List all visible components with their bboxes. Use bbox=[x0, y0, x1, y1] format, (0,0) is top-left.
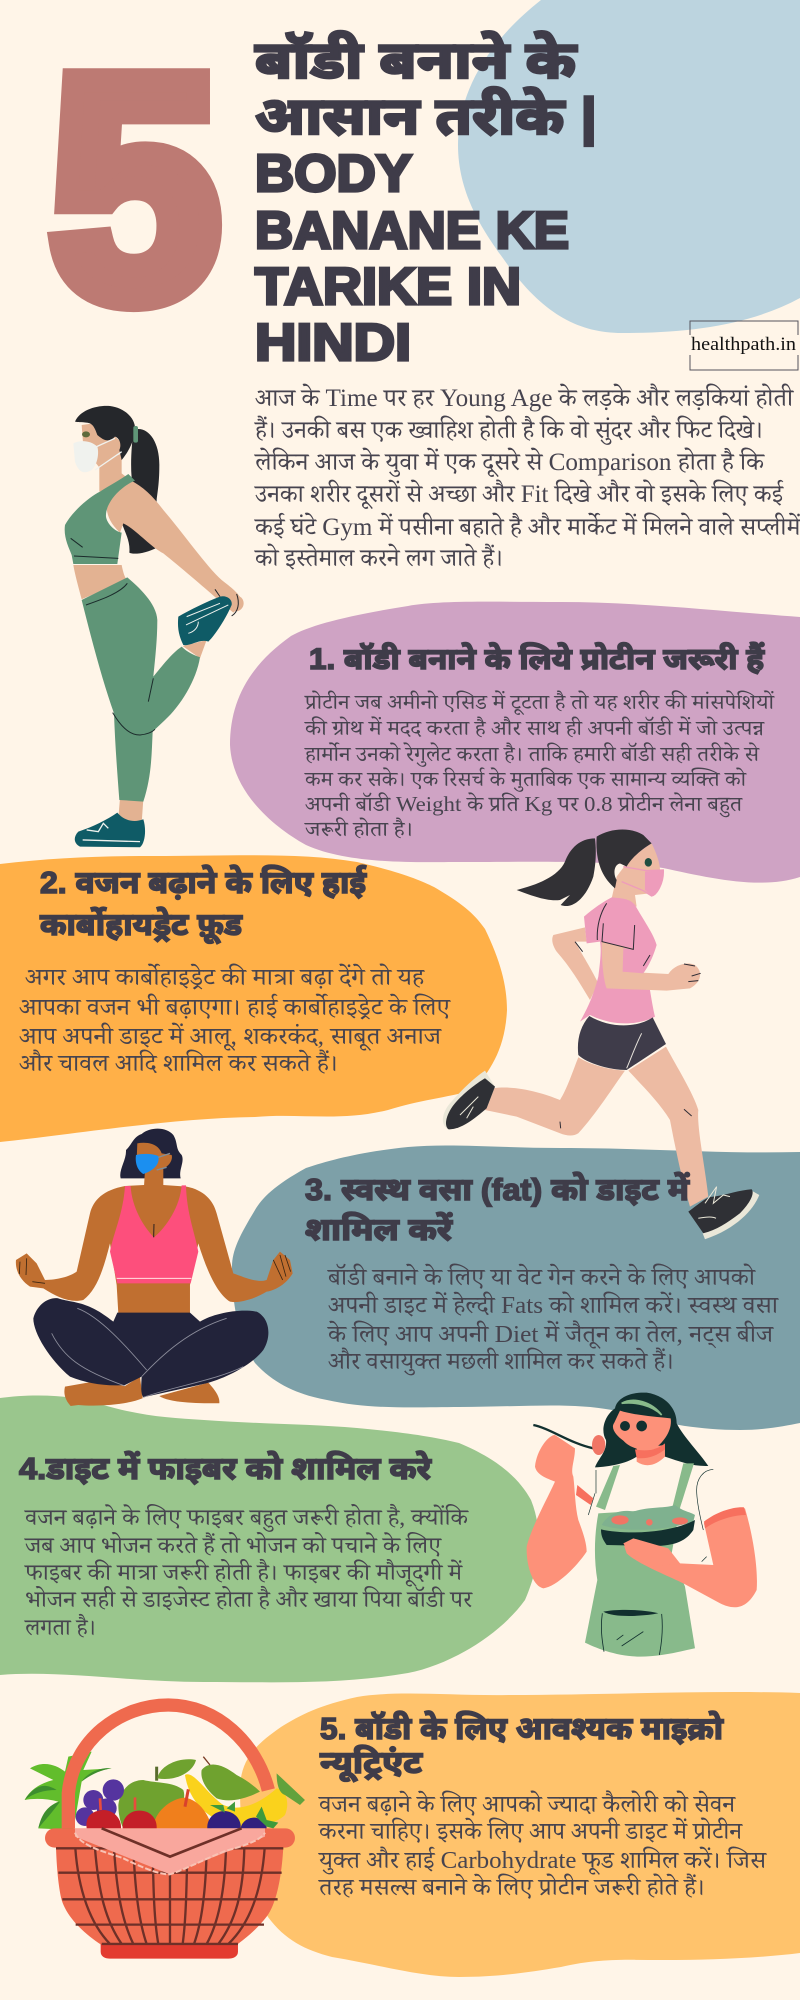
text: section 2 body: और चावल आदि शामिल कर सकते हैं। bbox=[19, 1049, 338, 1077]
text: section 2 body: आप अपनी डाइट में आलू, शकरकंद, साबूत अनाज bbox=[19, 1022, 443, 1051]
illustration: stretching woman bbox=[65, 406, 244, 847]
intro text: उनका शरीर दूसरों से अच्छा और Fit दिखे और वो इसके लिए कई bbox=[254, 479, 784, 509]
text: section 3 body: के लिए आप अपनी Diet में जैतून का तेल, नट्स बीज bbox=[327, 1320, 775, 1349]
heading: section 5 bbox=[320, 1711, 724, 1782]
text: section 5 body: वजन बढ़ाने के लिए आपको ज्यादा कैलोरी को सेवन bbox=[318, 1790, 737, 1818]
intro text: आज के Time पर हर Young Age के लड़के और लड़कियां होती bbox=[255, 383, 795, 412]
illustration: running woman bbox=[443, 830, 759, 1239]
text: section 5 body: तरह मसल्स बनाने के लिए प्रोटीन जरूरी होते हैं। bbox=[318, 1873, 705, 1901]
text: section 4 body: लगता है। bbox=[24, 1614, 96, 1640]
text: section 1 body: अपनी बॉडी Weight के प्रति Kg पर 0.8 प्रोटीन लेना बहुत bbox=[305, 792, 744, 818]
panel: yellow blob bbox=[240, 1692, 800, 1977]
text: section 1 body: हार्मोन उनको रेगुलेट करता है। ताकि हमारी बॉडी सही तरीके से bbox=[304, 742, 760, 768]
title bbox=[255, 31, 597, 372]
text: section 2 body bbox=[19, 963, 451, 1077]
panel: green blob bbox=[0, 1396, 539, 1682]
text: section 1 body: कम कर सके। एक रिसर्च के मुताबिक एक सामान्य व्यक्ति को bbox=[304, 767, 747, 793]
panel: purple blob bbox=[230, 602, 800, 883]
illustration: fruit basket bbox=[25, 1705, 305, 1959]
text: section 5 body bbox=[318, 1790, 768, 1901]
text: section 2 body: आपका वजन भी बढ़ाएगा। हाई कार्बोहाइड्रेट के लिए bbox=[19, 993, 451, 1021]
text: section 1 body: जरूरी होता है। bbox=[304, 817, 413, 841]
text: section 3 body bbox=[327, 1263, 779, 1376]
title: आसान तरीके | bbox=[255, 87, 597, 146]
heading: section 2 bbox=[40, 865, 367, 944]
heading: section 1: 1. बॉडी बनाने के लिये प्रोटीन जरूरी हैं bbox=[309, 641, 765, 676]
brand label: healthpath.in: healthpath.in bbox=[691, 334, 797, 355]
title: बॉडी बनाने के bbox=[255, 31, 577, 90]
panel: teal blob bbox=[232, 1145, 800, 1430]
illustration: meditating woman bbox=[16, 1129, 293, 1406]
heading: section 3: शामिल करें bbox=[305, 1212, 453, 1247]
blob: blue header bbox=[458, 0, 800, 333]
intro text: कई घंटे Gym में पसीना बहाते है और मार्केट में मिलने वाले सप्लीमेंट bbox=[254, 511, 800, 541]
intro text: को इस्तेमाल करने लग जाते हैं। bbox=[254, 543, 503, 572]
heading: section 5: न्यूट्रिएंट bbox=[320, 1745, 423, 1782]
text: section 4 body: जब आप भोजन करते हैं तो भोजन को पचाने के लिए bbox=[24, 1532, 443, 1558]
heading: section 4: 4.डाइट में फाइबर को शामिल करे bbox=[19, 1451, 432, 1486]
text: section 3 body: और वसायुक्त मछली शामिल कर सकते हैं। bbox=[328, 1347, 674, 1376]
text: section 1 body: की ग्रोथ में मदद करता है और साथ ही अपनी बॉडी में जो उत्पन्न bbox=[304, 716, 765, 740]
intro text: लेकिन आज के युवा में एक दूसरे से Comparison होता है कि bbox=[254, 446, 765, 478]
title: BODY bbox=[255, 145, 412, 203]
text: section 4 body: वजन बढ़ाने के लिए फाइबर बहुत जरूरी होता है, क्योंकि bbox=[24, 1504, 470, 1532]
intro text bbox=[254, 383, 800, 572]
illustration: woman eating salad bbox=[527, 1393, 757, 1657]
panel: orange blob bbox=[0, 855, 507, 1142]
text: section 3 body: बॉडी बनाने के लिए या वेट गेन करने के लिए आपको bbox=[327, 1263, 756, 1291]
brand label: healthpath.in bbox=[690, 321, 798, 370]
text: section 1 body bbox=[304, 690, 775, 841]
text: section 2 body: अगर आप कार्बोहाइड्रेट की मात्रा बढ़ा देंगे तो यह bbox=[25, 963, 426, 991]
text: section 5 body: करना चाहिए। इसके लिए आप अपनी डाइट में प्रोटीन bbox=[318, 1817, 744, 1845]
heading: section 3: 3. स्वस्थ वसा (fat) को डाइट में bbox=[305, 1172, 690, 1207]
intro text: हैं। उनकी बस एक ख्वाहिश होती है कि वो सुंदर और फिट दिखे। bbox=[254, 414, 763, 446]
text: section 3 body: अपनी डाइट में हेल्दी Fats को शामिल करें। स्वस्थ वसा bbox=[328, 1291, 779, 1319]
title: HINDI bbox=[255, 314, 411, 372]
heading: section 5: 5. बॉडी के लिए आवश्यक माइक्रो bbox=[320, 1711, 724, 1746]
text: section 4 body bbox=[24, 1504, 473, 1640]
title: TARIKE IN bbox=[255, 258, 521, 316]
text: section 5 body: युक्त और हाई Carbohydrate फूड शामिल करें। जिस bbox=[318, 1846, 768, 1875]
heading: section 3 bbox=[305, 1172, 690, 1247]
heading: section 2: कार्बोहायड्रेट फ़ूड bbox=[40, 907, 243, 944]
heading: section 2: 2. वजन बढ़ाने के लिए हाई bbox=[40, 865, 367, 900]
title: BANANE KE bbox=[255, 202, 569, 260]
text: section 1 body: प्रोटीन जब अमीनो एसिड में टूटता है तो यह शरीर की मांसपेशियों bbox=[304, 690, 775, 715]
text: section 4 body: फाइबर की मात्रा जरूरी होती है। फाइबर की मौजूदगी में bbox=[24, 1559, 463, 1587]
text: section 4 body: भोजन सही से डाइजेस्ट होता है और खाया पिया बॉडी पर bbox=[25, 1586, 473, 1612]
big numeral 5: 5 bbox=[51, 12, 219, 364]
